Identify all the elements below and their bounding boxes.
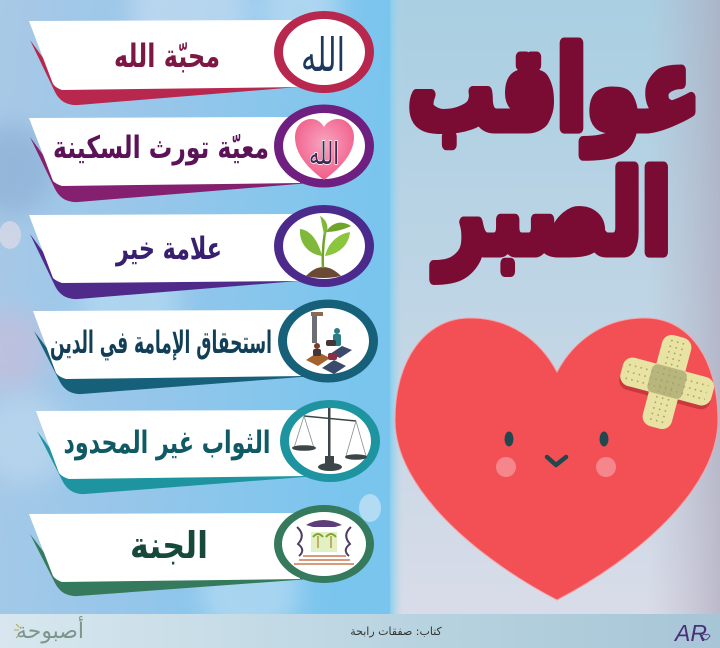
bandage [617, 331, 717, 433]
banner front [29, 214, 300, 283]
icon: pink heart: الله [309, 137, 339, 172]
banner back [34, 331, 314, 394]
banner front [29, 117, 300, 186]
illustration: smiling heart with bandage [395, 318, 718, 600]
banner label: محبّة الله [114, 37, 220, 75]
banner 3: sign of goodness [29, 205, 374, 299]
icon: garden gate [274, 505, 374, 583]
banner back [30, 40, 310, 105]
icon: seedling [274, 205, 374, 287]
mouth [547, 457, 566, 465]
banner label: علامة خير [115, 231, 222, 267]
banner back [30, 234, 310, 299]
icon: balance scale [280, 400, 380, 482]
heart body [395, 318, 718, 600]
left cheek [496, 457, 516, 477]
right eye [600, 432, 608, 446]
banner label: الجنة [130, 524, 208, 567]
panel: footer strip [0, 614, 720, 648]
banner 4: deserving leadership in religion [33, 300, 378, 394]
panel: right pale background [390, 0, 720, 614]
banner label: استحقاق الإمامة في الدين [50, 325, 272, 361]
logo: AR signature: AR [673, 620, 707, 646]
icon: Allah calligraphy: الله [301, 28, 345, 82]
banner back [30, 534, 310, 596]
banner 6: paradise [29, 505, 374, 596]
icon: people praying [278, 300, 378, 382]
banner 1: love of God [29, 11, 374, 105]
logo: Osbooha: أصبوحة [16, 616, 84, 644]
banner label: الثواب غير المحدود [64, 425, 270, 461]
footer: book source: كتاب: صفقات رابحة [350, 625, 443, 638]
banner 2: divine companionship [29, 104, 374, 202]
banner back [37, 431, 317, 494]
banner 5: unlimited reward [36, 400, 380, 494]
title: consequences of patience [408, 25, 700, 279]
icon: Allah calligraphy [274, 11, 374, 93]
right cheek [596, 457, 616, 477]
banner front [29, 513, 300, 582]
panel: left blue background [0, 0, 390, 640]
banner label: معيّة تورث السكينة [53, 130, 269, 166]
banner back [30, 137, 310, 202]
banner front [29, 20, 300, 90]
banner front [33, 310, 304, 379]
left eye [504, 432, 514, 446]
icon: pink heart [274, 104, 374, 188]
banner front [36, 410, 307, 479]
